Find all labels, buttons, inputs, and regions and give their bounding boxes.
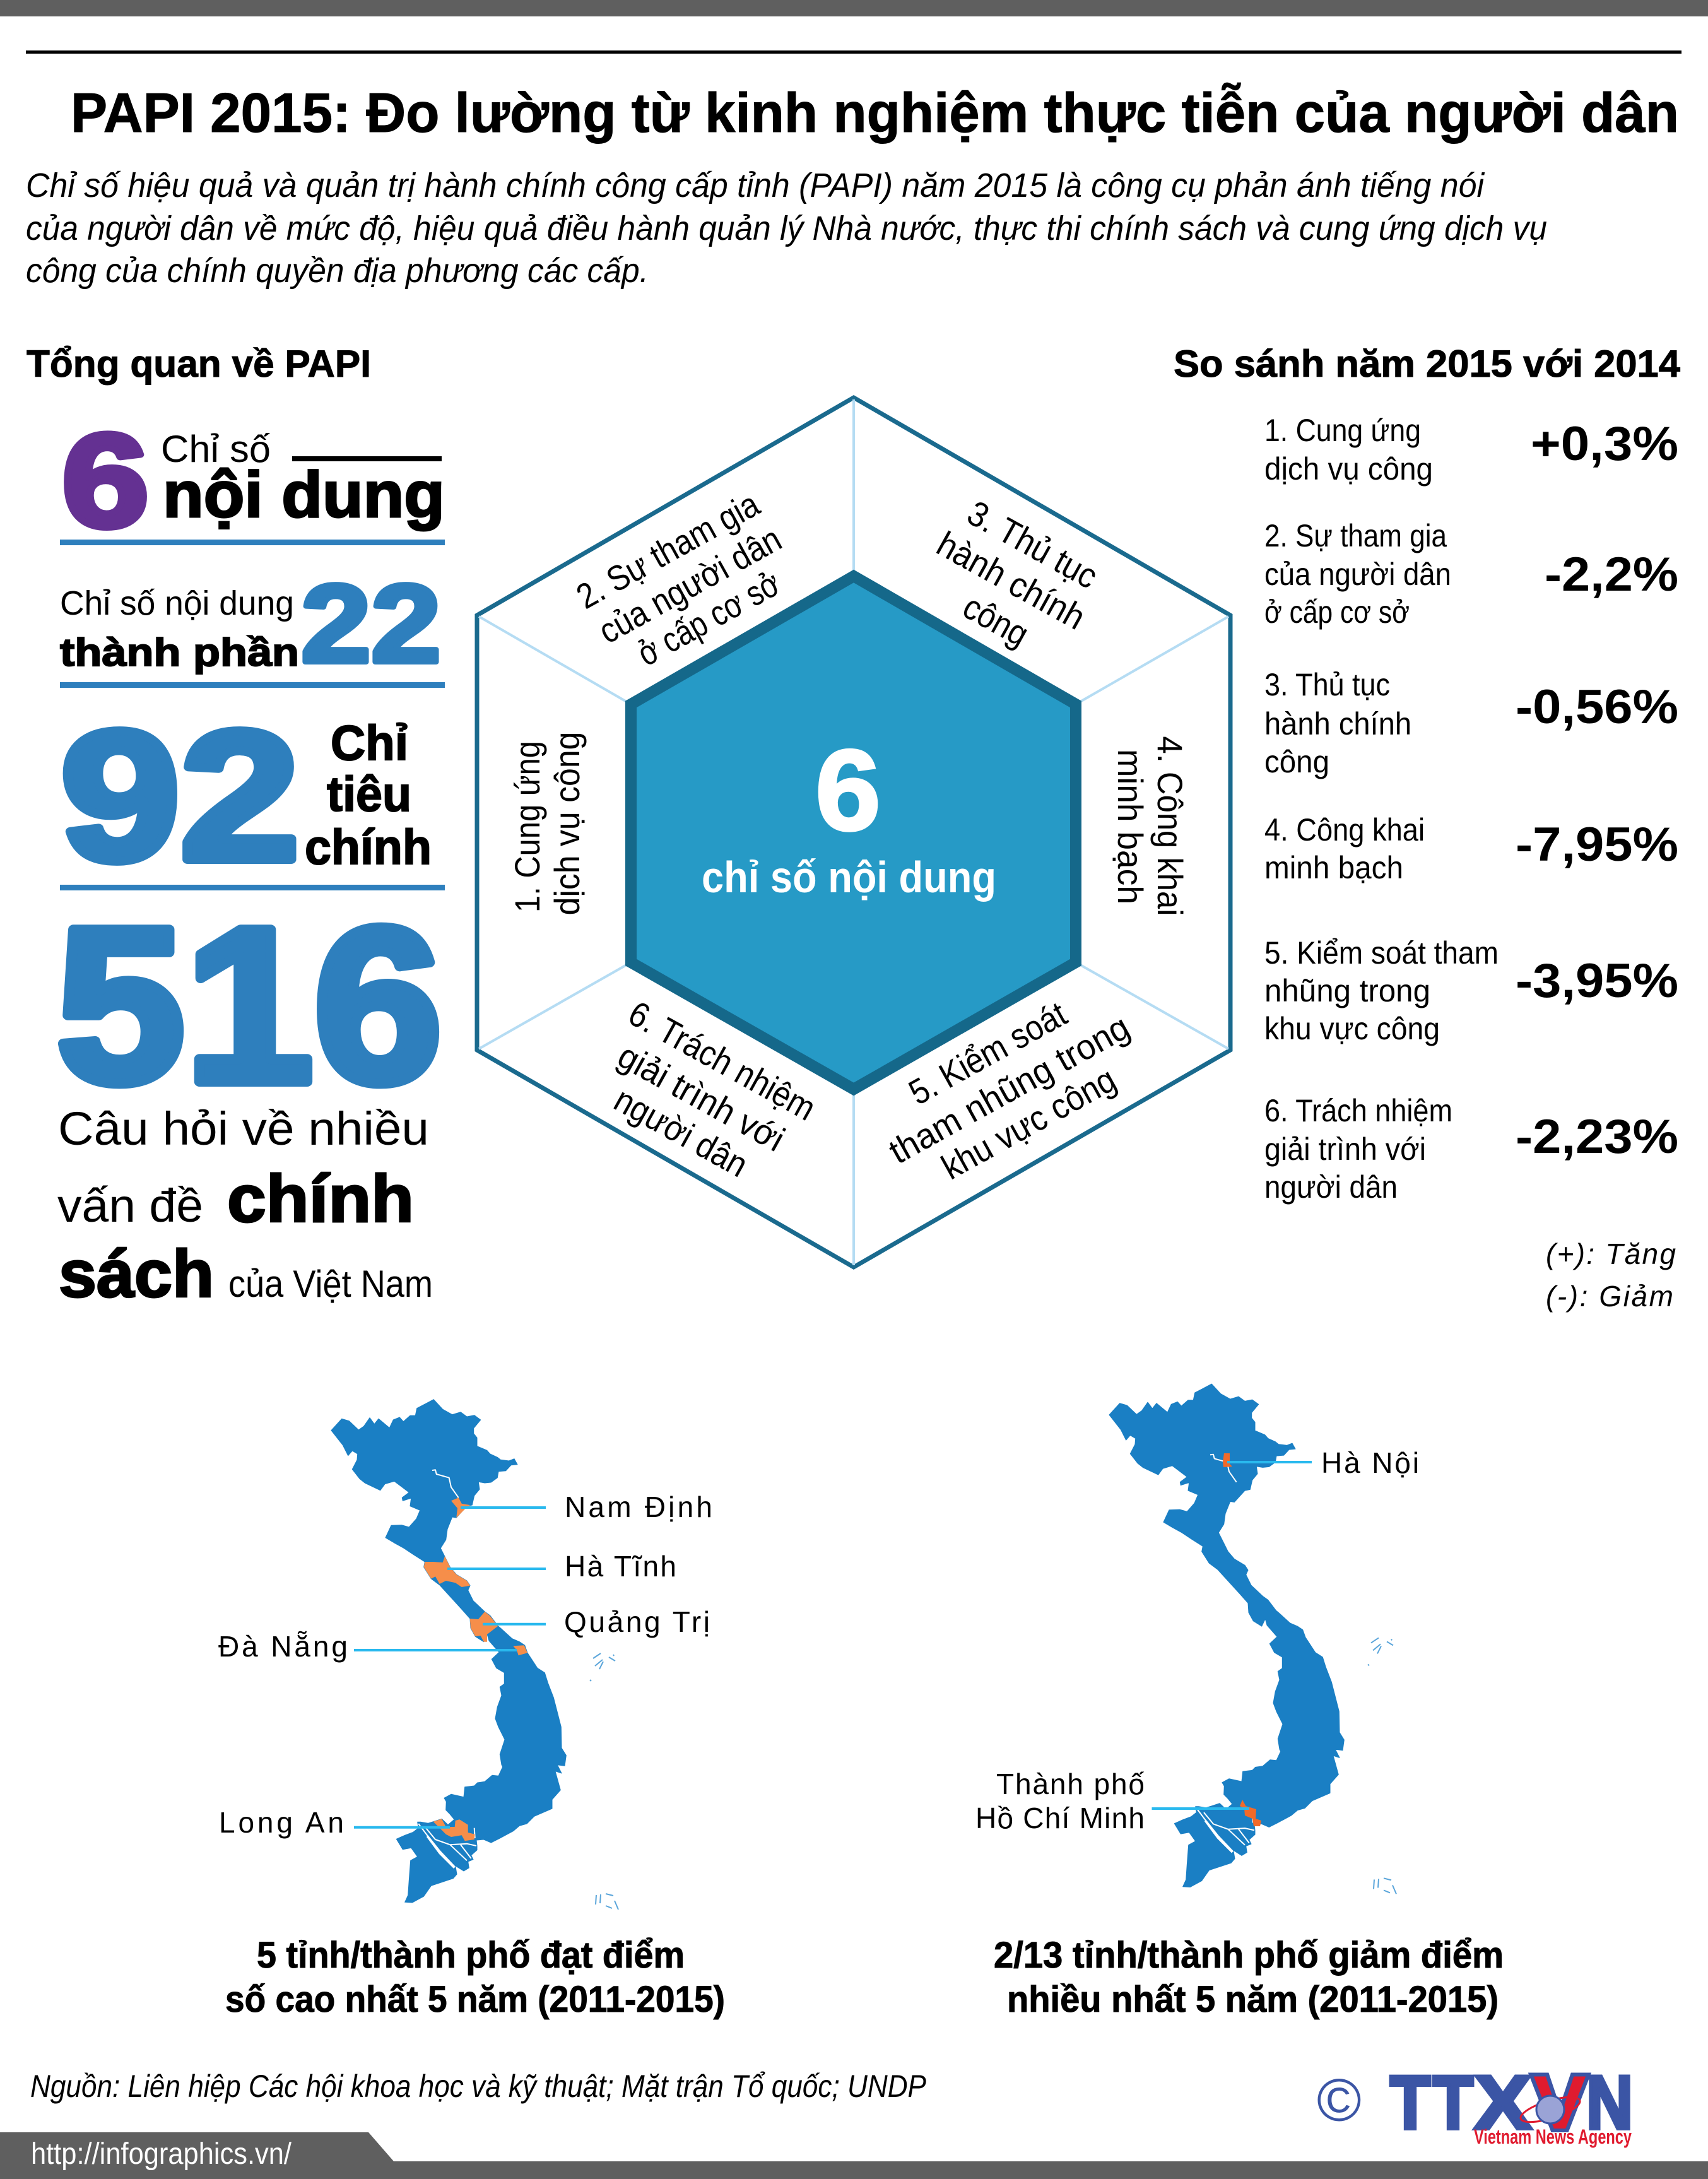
copyright mark: © [1317,2067,1362,2134]
stat: 516 questions: 516 [56,882,442,1129]
hexagon diagram [477,398,1230,1267]
province labels: Hà Tĩnh [565,1550,676,1583]
centre hexagon [631,576,1076,1089]
stat: 6 content indexes: 6 [62,406,149,555]
stat: 92 main indicators: tiêu [327,766,411,822]
intro text: Chỉ số hiệu quả và quản trị hành chính công cấp tỉnh (PAPI) năm 2015 là công cụ phản ánh tiếng nói [26,167,1485,204]
segment 6: 6. Trách nhiệm [622,993,822,1128]
agency name: Vietnam News Agency [1474,2125,1632,2148]
centre number: 6 [815,726,881,854]
stat: 6 content indexes: Chỉ số [161,428,271,470]
item 3 [1264,667,1678,779]
segment 2: ở cấp cơ sở [631,563,787,673]
stat: 516 questions: chính [227,1162,414,1236]
segment 1: dịch vụ công [547,732,587,915]
segment 1: 1. Cung ứng [507,741,547,912]
stat: 92 main indicators: 92 [61,693,300,899]
segment 2 [570,483,787,673]
stat: 92 main indicators [61,693,432,899]
leader lines [354,1508,546,1828]
header rule [26,50,1681,54]
item 1: dịch vụ công [1264,451,1433,487]
city labels [975,1446,1419,1834]
footer bar [0,2132,1708,2179]
city labels: Hồ Chí Minh [975,1802,1145,1834]
vietnam map shape [1109,1384,1396,1894]
item 3: công [1264,744,1329,779]
item 5 [1264,935,1678,1046]
city labels: Hà Nội [1321,1446,1419,1479]
legend: (-): Giảm [1546,1280,1673,1313]
caption: left map: số cao nhất 5 năm (2011-2015) [225,1979,725,2020]
intro text [26,167,1547,290]
item 4: minh bạch [1264,850,1403,885]
map: 2 provinces with largest decline [975,1384,1419,1894]
panel: comparison list [1264,413,1678,1313]
item 2: của người dân [1264,557,1451,592]
caption: left map: 5 tỉnh/thành phố đạt điểm [257,1935,685,1976]
segment 1 [507,732,587,915]
caption: right map: nhiều nhất 5 năm (2011-2015) [1007,1979,1499,2020]
item 6: người dân [1264,1169,1398,1205]
item 2: ở cấp cơ sở [1264,594,1410,630]
city labels: Thành phố [996,1768,1145,1800]
segment 3: hành chính [931,524,1092,637]
caption: right map: 2/13 tỉnh/thành phố giảm điểm [994,1935,1504,1976]
segment 3: 3. Thủ tục [961,493,1104,596]
province labels: Đà Nẵng [218,1630,348,1663]
stat: 516 questions: của Việt Nam [228,1263,433,1305]
item 6: 6. Trách nhiệm [1264,1093,1452,1128]
province labels: Quảng Trị [564,1605,710,1638]
leader lines [1152,1462,1312,1809]
segment 6: người dân [608,1079,755,1184]
item 6: giải trình với [1264,1131,1426,1167]
heading: overview: Tổng quan về PAPI [27,343,371,385]
segment 4 [1110,736,1190,916]
item 4: 4. Công khai [1264,812,1425,847]
stat: 22 component indexes [60,562,441,686]
intro text: của người dân về mức độ, hiệu quả điều hành quản lý Nhà nước, thực thi chính sách và cung ứng dịch vụ [26,210,1547,247]
outer hexagon [477,398,1230,1267]
item 5: -3,95% [1516,954,1678,1008]
second T: T [1433,2060,1473,2145]
segment 4: minh bạch [1110,749,1150,904]
caption: right map [994,1935,1504,2020]
caption: left map [225,1935,725,2020]
item 2: -2,2% [1545,548,1678,601]
highlighted provinces [424,1497,527,1841]
item 1: 1. Cung ứng [1264,413,1421,448]
legend: (+): Tăng [1546,1237,1676,1270]
item 4: -7,95% [1516,818,1678,871]
province labels: Long An [219,1806,344,1839]
segment 6: giải trình với [611,1036,791,1159]
logo: TTXVN [1317,2060,1633,2148]
intro text: công của chính quyền địa phương các cấp. [26,252,649,290]
item 4 [1264,812,1678,885]
stat: 516 questions: sách [59,1237,214,1311]
footer url: http://infographics.vn/ [31,2137,292,2171]
stat: 22 component indexes: Chỉ số nội dung [60,584,294,622]
segment 2: của người dân [592,519,787,651]
item 3: hành chính [1264,706,1411,741]
item 5: nhũng trong [1264,973,1430,1008]
item 3: -0,56% [1516,680,1678,734]
segment 3: công [957,586,1035,654]
segment 5: 5. Kiểm soát [902,993,1073,1113]
first T: T [1390,2060,1430,2145]
stat: 22 component indexes: thành phần [60,631,299,675]
item 6 [1264,1093,1678,1205]
item 6: -2,23% [1516,1110,1678,1164]
stat: 92 main indicators: chính [305,819,432,875]
panel: PAPI overview stats [56,406,445,1311]
item 5: 5. Kiểm soát tham [1264,935,1499,971]
segment 4: 4. Công khai [1150,736,1190,916]
segment 6 [608,993,822,1184]
item 3: 3. Thủ tục [1264,667,1390,702]
province labels: Nam Định [565,1491,712,1523]
N letter: N [1586,2060,1633,2145]
segment 2: 2. Sự tham gia [570,483,766,617]
stat: 92 main indicators: Chỉ [331,715,408,771]
V letter: V [1533,2060,1586,2145]
item 1: +0,3% [1531,417,1678,471]
stat: 22 component indexes: 22 [301,562,441,686]
item 2: 2. Sự tham gia [1264,518,1447,553]
map: top 5 provinces [218,1400,712,1910]
item 1 [1264,413,1678,487]
source: Nguồn: Liên hiệp Các hội khoa học và kỹ thuật; Mặt trận Tổ quốc; UNDP [30,2069,927,2104]
province labels [218,1491,712,1839]
legend [1546,1237,1676,1313]
vietnam map shape [331,1400,618,1910]
stat: 516 questions [56,882,442,1311]
globe [1518,2092,1582,2127]
item 5: khu vực công [1264,1011,1440,1046]
title: PAPI 2015: Đo lường từ kinh nghiệm thực tiễn của người dân [71,81,1679,144]
centre label: chỉ số nội dung [702,853,996,902]
item 2 [1264,518,1678,630]
X letter: X [1475,2060,1531,2145]
stat: 516 questions: vấn đề [57,1179,203,1232]
top bar [0,0,1708,16]
segment 5: khu vực công [935,1059,1122,1187]
stat: 516 questions: Câu hỏi về nhiều [58,1102,429,1155]
stat: 6 content indexes [62,406,445,555]
stat: 6 content indexes: nội dung [163,458,445,531]
highlighted cities [1223,1453,1261,1826]
segment 5: tham nhũng trong [882,1007,1136,1171]
heading: comparison: So sánh năm 2015 với 2014 [1174,343,1681,385]
